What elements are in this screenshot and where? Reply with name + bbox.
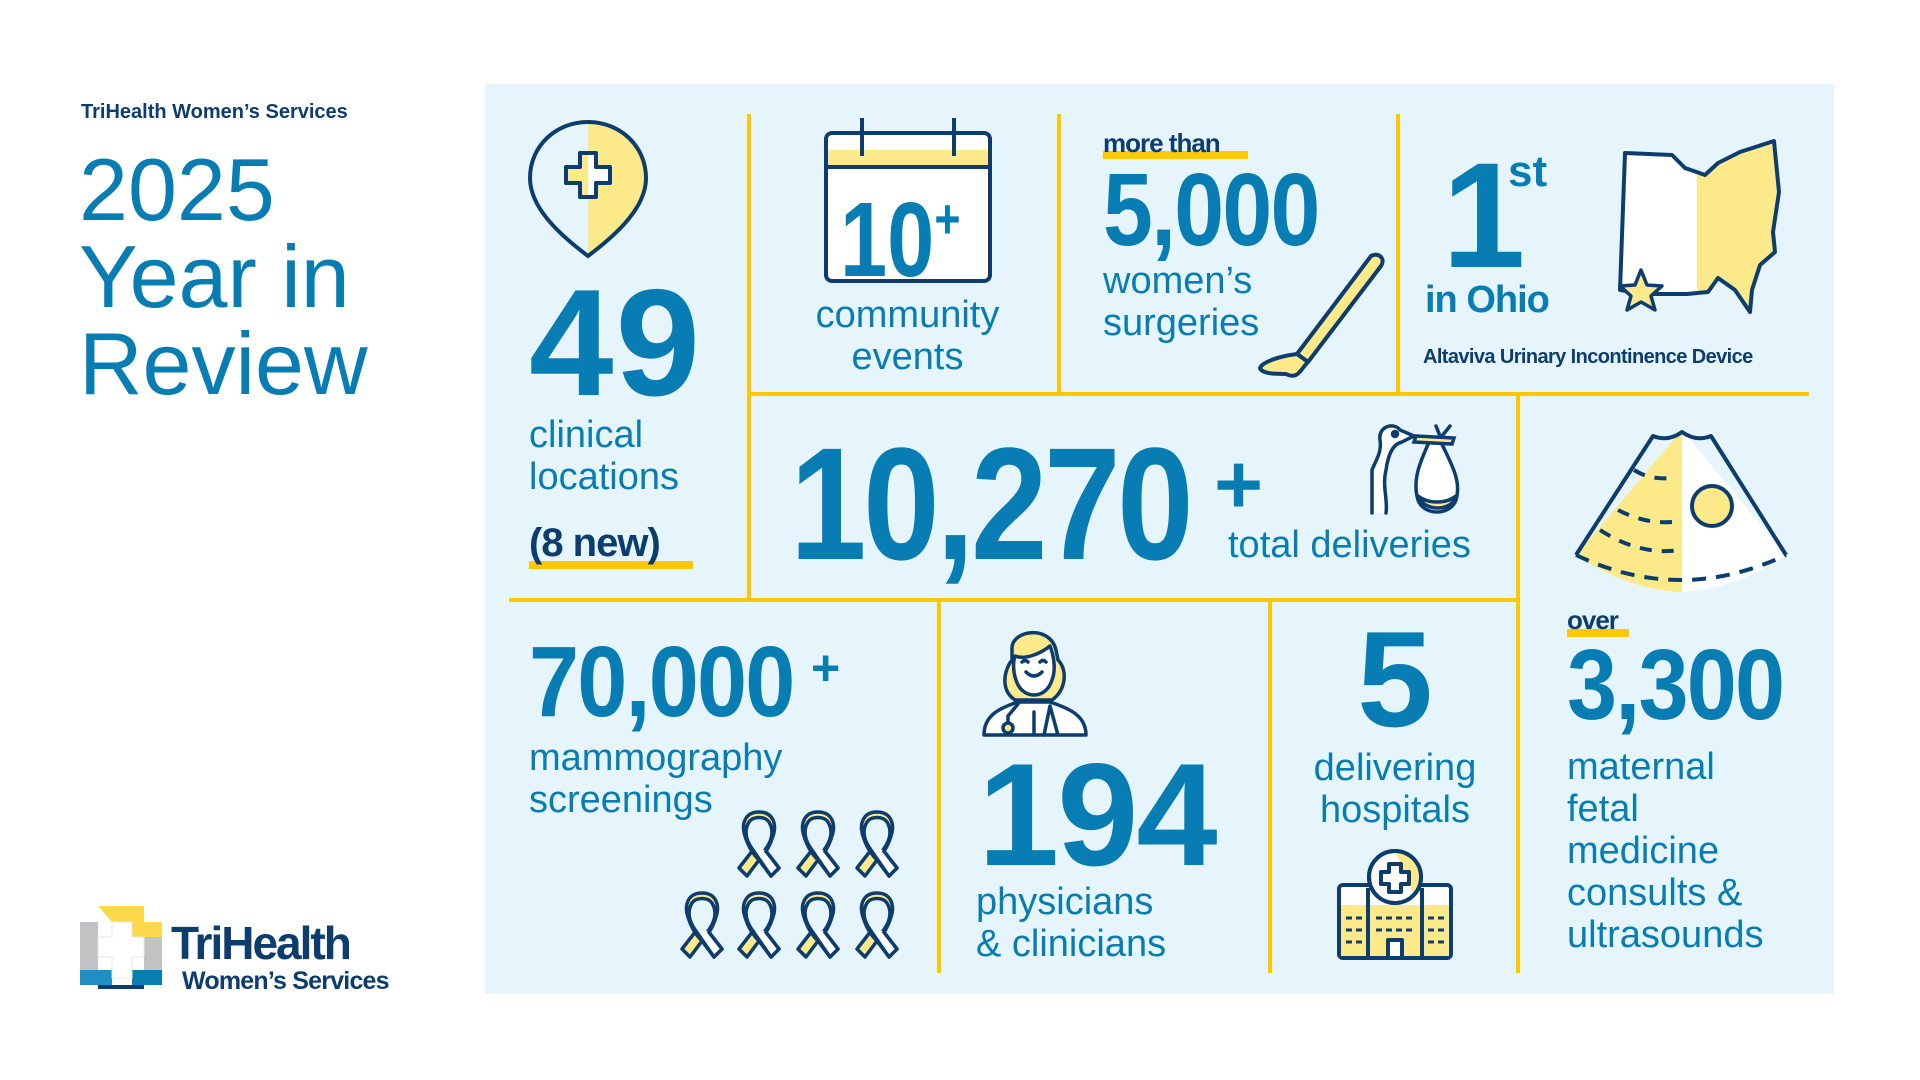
title: Review (79, 314, 368, 413)
stat: 1st in Ohio: st (1508, 147, 1547, 196)
stat: 10,270+ total deliveries: total deliveries (1228, 524, 1471, 566)
stat: more than 5,000 women's surgeries: surgeries (1103, 302, 1259, 344)
logo text (171, 917, 389, 995)
icon: Ohio map (1620, 141, 1779, 312)
icon: hospital (1339, 851, 1451, 958)
stat: 194 physicians & clinicians: physicians (976, 881, 1153, 923)
stat: 1st in Ohio: in Ohio (1425, 279, 1549, 321)
stat: 70,000+ mammography screenings: screenings (529, 779, 713, 821)
stat: over 3,300 maternal fetal medicine consults: consults & (1567, 872, 1742, 914)
stat: 10,270+ total deliveries (790, 414, 1471, 593)
icon: calendar (826, 118, 990, 281)
icon: ultrasound (1576, 430, 1786, 592)
stat: 70,000+ mammography screenings (529, 626, 840, 821)
stat: 10,270+ total deliveries: 10,270 (790, 414, 1190, 593)
stat: more than 5,000 women's surgeries: more than (1103, 128, 1220, 158)
stat: 10+ community events (816, 181, 1000, 378)
stat: more than 5,000 women's surgeries: 5,000 (1103, 152, 1319, 267)
icon: ribbons (682, 812, 897, 957)
icon: stork (1372, 426, 1458, 513)
stat: 49 clinical locations (529, 258, 702, 569)
stat: more than 5,000 women's surgeries (1103, 128, 1319, 344)
stat: over 3,300 maternal fetal medicine consults: 3,300 (1567, 629, 1783, 741)
stat: 5 delivering hospitals: delivering (1314, 747, 1476, 789)
stat: 194 physicians & clinicians: 194 (978, 733, 1216, 896)
callout: (8 new): (8 new) (529, 521, 660, 565)
stat: 70,000+ mammography screenings: mammography (529, 737, 782, 779)
stat: 5 delivering hospitals: 5 (1357, 603, 1433, 755)
icon: doctor (984, 633, 1086, 735)
title: Year in (79, 227, 350, 326)
stat: over 3,300 maternal fetal medicine consults: maternal (1567, 746, 1715, 788)
stat: over 3,300 maternal fetal medicine consults: fetal (1567, 788, 1639, 830)
stat: over 3,300 maternal fetal medicine consults: over (1567, 605, 1618, 635)
stat: 10+ community events: events (852, 336, 963, 378)
kicker: TriHealth Women's Services: TriHealth Women’s Services (81, 101, 348, 123)
stat: 10+ community events: 10+ (840, 181, 960, 299)
title (79, 140, 368, 413)
icon: location pin (530, 122, 646, 256)
stat: 1st in Ohio: 1 (1442, 131, 1525, 299)
stat: 194 physicians & clinicians: & clinicians (976, 923, 1166, 965)
stat: 5 delivering hospitals (1314, 603, 1476, 831)
stat: 10+ community events: community (816, 294, 999, 336)
stat: 5 delivering hospitals: hospitals (1320, 789, 1470, 831)
stat: 49 clinical locations: clinical (529, 414, 643, 456)
stat: over 3,300 maternal fetal medicine consults: ultrasounds (1567, 914, 1763, 956)
stat: over 3,300 maternal fetal medicine consults: medicine (1567, 830, 1719, 872)
logo text: Women’s Services (182, 967, 389, 995)
title: 2025 (79, 140, 275, 239)
stat: 1st in Ohio: Altaviva Urinary Incontinence Device (1423, 346, 1753, 368)
logo text: TriHealth (171, 917, 350, 969)
stat: 10,270+ total deliveries: + (1214, 437, 1263, 531)
stat: 1st in Ohio (1423, 131, 1753, 368)
stat: 70,000+ mammography screenings: 70,000 (529, 626, 793, 738)
stat: 194 physicians & clinicians (976, 733, 1217, 965)
logo mark (80, 906, 162, 989)
icon: scalpel (1260, 255, 1383, 376)
stat: over 3,300 maternal fetal medicine consults (1567, 605, 1783, 956)
stat: 70,000+ mammography screenings: + (811, 640, 840, 696)
stat: more than 5,000 women's surgeries: women’s (1103, 260, 1252, 302)
panel background (485, 84, 1834, 994)
stat: 49 clinical locations: locations (529, 456, 679, 498)
stat: 49 clinical locations: 49 (529, 258, 702, 428)
